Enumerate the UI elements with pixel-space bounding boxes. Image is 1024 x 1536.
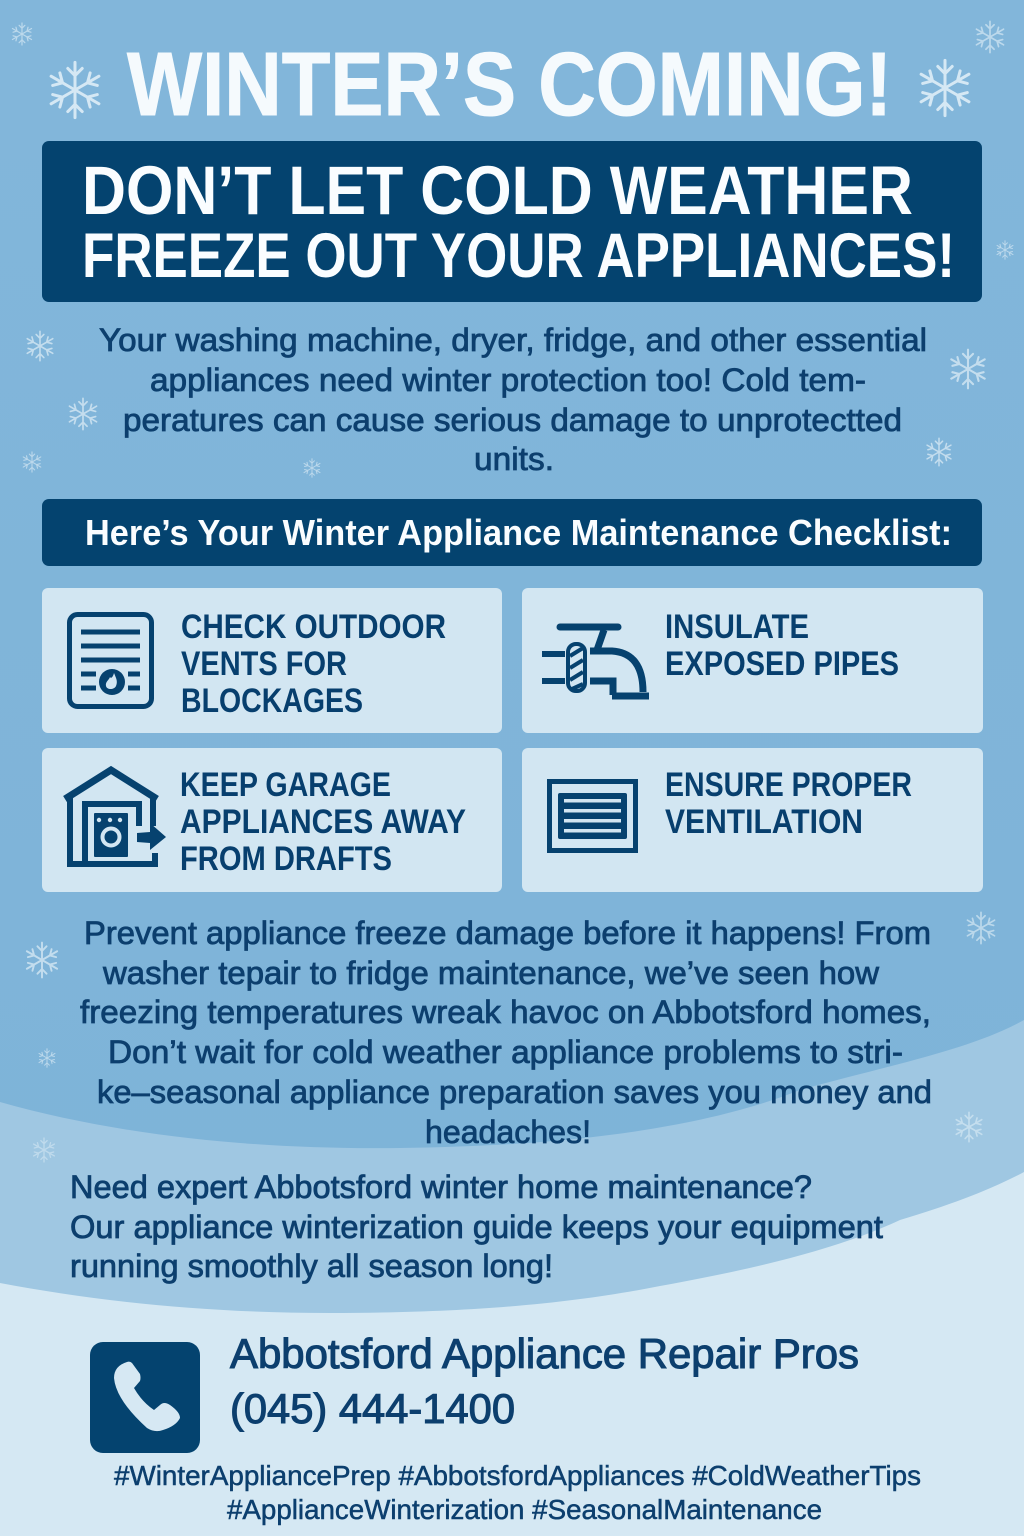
text block: prevent freeze damage: ke–seasonal appliance preparation saves you money and — [97, 1074, 932, 1110]
panel: insulate exposed pipes — [522, 588, 983, 733]
icon: garage with washer — [65, 770, 166, 864]
label: FROM DRAFTS — [180, 840, 392, 878]
label: VENTS FOR — [181, 645, 347, 683]
intro text block: units. — [474, 441, 554, 477]
panel: ensure proper ventilation — [522, 748, 983, 892]
label: ENSURE PROPER — [665, 766, 912, 804]
snow hill: front layer — [0, 1172, 1024, 1536]
text block: prevent freeze damage: Prevent appliance freeze damage before it happens! From — [84, 915, 931, 951]
contact: company name and phone number: Abbotsford Appliance Repair Pros — [230, 1330, 859, 1377]
label: KEEP GARAGE — [180, 766, 391, 804]
label: EXPOSED PIPES — [665, 645, 899, 683]
snow hill: back layer — [0, 1020, 1024, 1536]
checklist heading bar: Here’s Your Winter Appliance Maintenance Checklist: — [85, 512, 952, 553]
label — [181, 608, 446, 720]
label — [180, 766, 466, 878]
text block: prevent freeze damage: headaches! — [425, 1114, 591, 1150]
hashtags: #WinterAppliancePrep #AbbotsfordAppliances #ColdWeatherTips — [114, 1460, 921, 1491]
text block: expert maintenance: running smoothly all season long! — [70, 1248, 553, 1284]
banner: headline — [42, 141, 982, 302]
hashtags — [114, 1460, 921, 1525]
contact: company name and phone number: (045) 444-1400 — [230, 1385, 515, 1432]
icon: vent document — [70, 614, 152, 706]
label: VENTILATION — [665, 803, 863, 841]
panel: keep garage appliances away from drafts — [42, 748, 502, 892]
checklist heading bar — [42, 499, 982, 566]
icon: ventilation grille — [550, 782, 636, 850]
text block: expert maintenance: Need expert Abbotsford winter home maintenance? — [70, 1169, 812, 1205]
intro text block: Your washing machine, dryer, fridge, and other essential — [99, 322, 927, 358]
hashtags: #ApplianceWinterization #SeasonalMaintenance — [227, 1494, 822, 1525]
intro text block — [99, 322, 927, 477]
text block: prevent freeze damage — [80, 915, 932, 1150]
text block: expert maintenance — [70, 1169, 883, 1284]
intro text block: appliances need winter protection too! Cold tem- — [150, 362, 866, 398]
title: WINTER’S COMING! — [127, 35, 892, 135]
text block: prevent freeze damage: Don’t wait for cold weather appliance problems to stri- — [108, 1034, 903, 1070]
intro text block: peratures can cause serious damage to unprotectted — [123, 402, 902, 438]
label: CHECK OUTDOOR — [181, 608, 446, 646]
label: APPLIANCES AWAY — [180, 803, 466, 841]
label — [665, 766, 912, 841]
label — [665, 608, 899, 683]
text block: expert maintenance: Our appliance winterization guide keeps your equipment — [70, 1209, 883, 1245]
panel: check outdoor vents — [42, 588, 502, 733]
icon: insulated pipe — [542, 627, 649, 696]
icon: phone — [90, 1342, 200, 1453]
label: BLOCKAGES — [181, 682, 363, 720]
text block: prevent freeze damage: washer tepair to fridge maintenance, we’ve seen how — [102, 955, 880, 991]
label: INSULATE — [665, 608, 809, 646]
text block: prevent freeze damage: freezing temperatures wreak havoc on Abbotsford homes, — [80, 994, 931, 1030]
contact: company name and phone number — [230, 1330, 859, 1432]
banner: headline: DON’T LET COLD WEATHER — [82, 152, 913, 229]
